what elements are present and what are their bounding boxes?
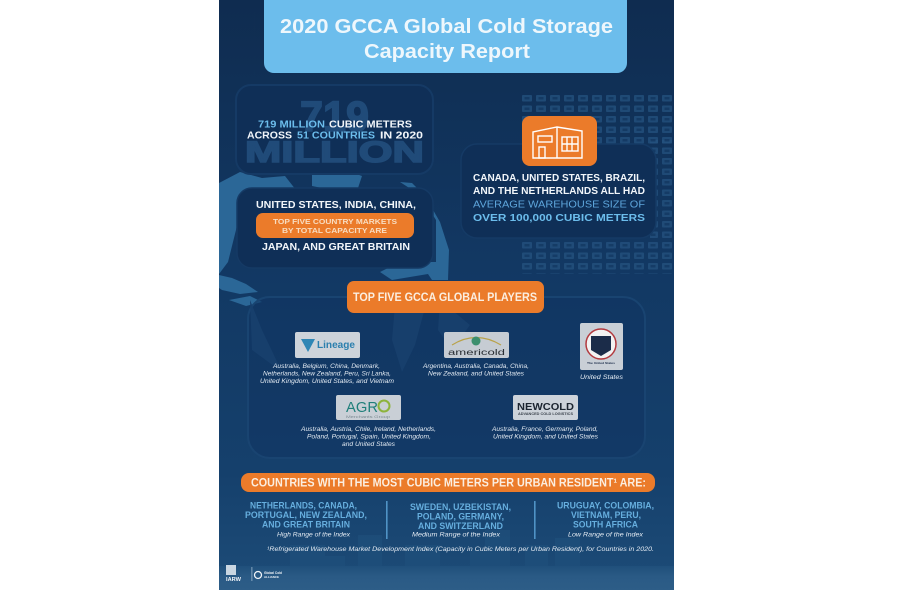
logo: IARW: IARW [226, 577, 241, 583]
panel: 719 million [236, 85, 433, 174]
stat text: IN 2020 [380, 130, 423, 142]
player: Americold [422, 332, 529, 378]
warehouse text: AVERAGE WAREHOUSE SIZE OF [473, 198, 645, 210]
warehouse icon pattern [520, 93, 673, 274]
stat text [247, 118, 423, 142]
player: United States Cold Storage: The United States [587, 361, 615, 365]
player: Lineage: Netherlands, New Zealand, Peru, Sri Lanka, [263, 372, 391, 378]
heading: cubic meters per urban resident [241, 473, 655, 492]
logo: Global Cold Chain Alliance: Global Cold [264, 571, 282, 575]
player: NewCold [491, 395, 598, 440]
title [280, 16, 613, 63]
stat text: 719 MILLION [258, 118, 325, 130]
panel: global players [248, 297, 645, 458]
panel: warehouse size [461, 144, 656, 238]
player: NewCold: ADVANCED COLD LOGISTICS [518, 412, 573, 416]
icon: warehouse [522, 116, 597, 166]
world map globe [219, 170, 449, 306]
player: United States Cold Storage: United States [580, 375, 623, 381]
player: AGRO: Australia, Austria, Chile, Ireland, Netherlands, [300, 427, 436, 433]
stat text: CUBIC METERS [329, 118, 412, 130]
title banner [264, 0, 627, 73]
warehouse text: OVER 100,000 CUBIC METERS [473, 212, 645, 224]
ghost text: MILLION: MILLION [245, 136, 424, 169]
column: low range: Low Range of the Index [568, 532, 644, 538]
column: medium range: POLAND, GERMANY, [417, 512, 504, 522]
player: Americold: Argentina, Australia, Canada, China, [422, 364, 529, 370]
title: Capacity Report [364, 41, 530, 63]
skyline [219, 530, 674, 590]
player: Lineage: Australia, Belgium, China, Denmark, [272, 364, 380, 370]
ghost text: 719: 719 [300, 93, 369, 141]
warehouse text: CANADA, UNITED STATES, BRAZIL, [473, 172, 645, 184]
column: low range: VIETNAM, PERU, [571, 510, 641, 521]
heading: top five players: TOP FIVE GCCA GLOBAL PLAYERS [353, 292, 537, 304]
title: 2020 GCCA Global Cold Storage [280, 16, 613, 38]
column: low range: URUGUAY, COLOMBIA, [557, 500, 654, 512]
orange callout [256, 213, 414, 238]
player: Americold: americold [448, 348, 505, 357]
player: Americold: New Zealand, and United States [428, 372, 524, 378]
faint map [250, 300, 470, 372]
column: high range: AND GREAT BRITAIN [262, 520, 350, 530]
warehouse text [473, 172, 645, 224]
orange callout: TOP FIVE COUNTRY MARKETS [273, 217, 397, 226]
panel: top five country markets [237, 188, 433, 268]
stat text: 51 COUNTRIES [297, 130, 375, 142]
player: United States Cold Storage [580, 323, 623, 381]
player: Lineage: United Kingdom, United States, and Vietnam [260, 379, 394, 385]
column: high range: NETHERLANDS, CANADA, [250, 500, 357, 512]
logo: Global Cold Chain Alliance: ALLIANCE [264, 575, 279, 579]
column: high range [245, 500, 367, 538]
column: medium range: Medium Range of the Index [412, 532, 501, 538]
heading: cubic meters per urban resident: COUNTRIES WITH THE MOST CUBIC METERS PER URBAN RESIDENT¹ ARE: [251, 478, 646, 490]
player: AGRO: Poland, Portugal, Spain, United Kingdom, [307, 434, 431, 440]
column: high range: PORTUGAL, NEW ZEALAND, [245, 510, 367, 521]
column: low range [557, 500, 654, 538]
player: Lineage [260, 332, 394, 385]
player: NewCold: United Kingdom, and United States [493, 434, 598, 440]
country list top: UNITED STATES, INDIA, CHINA, [256, 199, 416, 211]
logo: Global Cold Chain Alliance [252, 567, 282, 581]
player: AGRO [300, 395, 436, 448]
column: medium range [410, 502, 511, 538]
poster background [219, 0, 674, 590]
player: NewCold: Australia, France, Germany, Poland, [491, 427, 598, 433]
column: low range: SOUTH AFRICA [573, 520, 638, 530]
player: NewCold: NEWCOLD [517, 401, 574, 413]
heading: top five players [347, 281, 544, 313]
logo: IARW [226, 565, 241, 583]
warehouse text: AND THE NETHERLANDS ALL HAD [473, 185, 645, 197]
column: high range: High Range of the Index [277, 532, 351, 538]
column: medium range: AND SWITZERLAND [418, 521, 503, 532]
player: Lineage: Lineage [317, 340, 355, 351]
stat text: ACROSS [247, 130, 292, 142]
country list bottom: JAPAN, AND GREAT BRITAIN [262, 241, 410, 253]
player: AGRO: AGR [346, 399, 378, 416]
column: medium range: SWEDEN, UZBEKISTAN, [410, 502, 511, 513]
player: AGRO: Merchants Group [346, 414, 391, 419]
player: AGRO: and United States [342, 442, 395, 448]
footnote: ¹Refrigerated Warehouse Market Development Index (Capacity in Cubic Meters per Urban Resident), for Countries in 2020. [267, 547, 654, 553]
orange callout: BY TOTAL CAPACITY ARE [282, 226, 387, 235]
